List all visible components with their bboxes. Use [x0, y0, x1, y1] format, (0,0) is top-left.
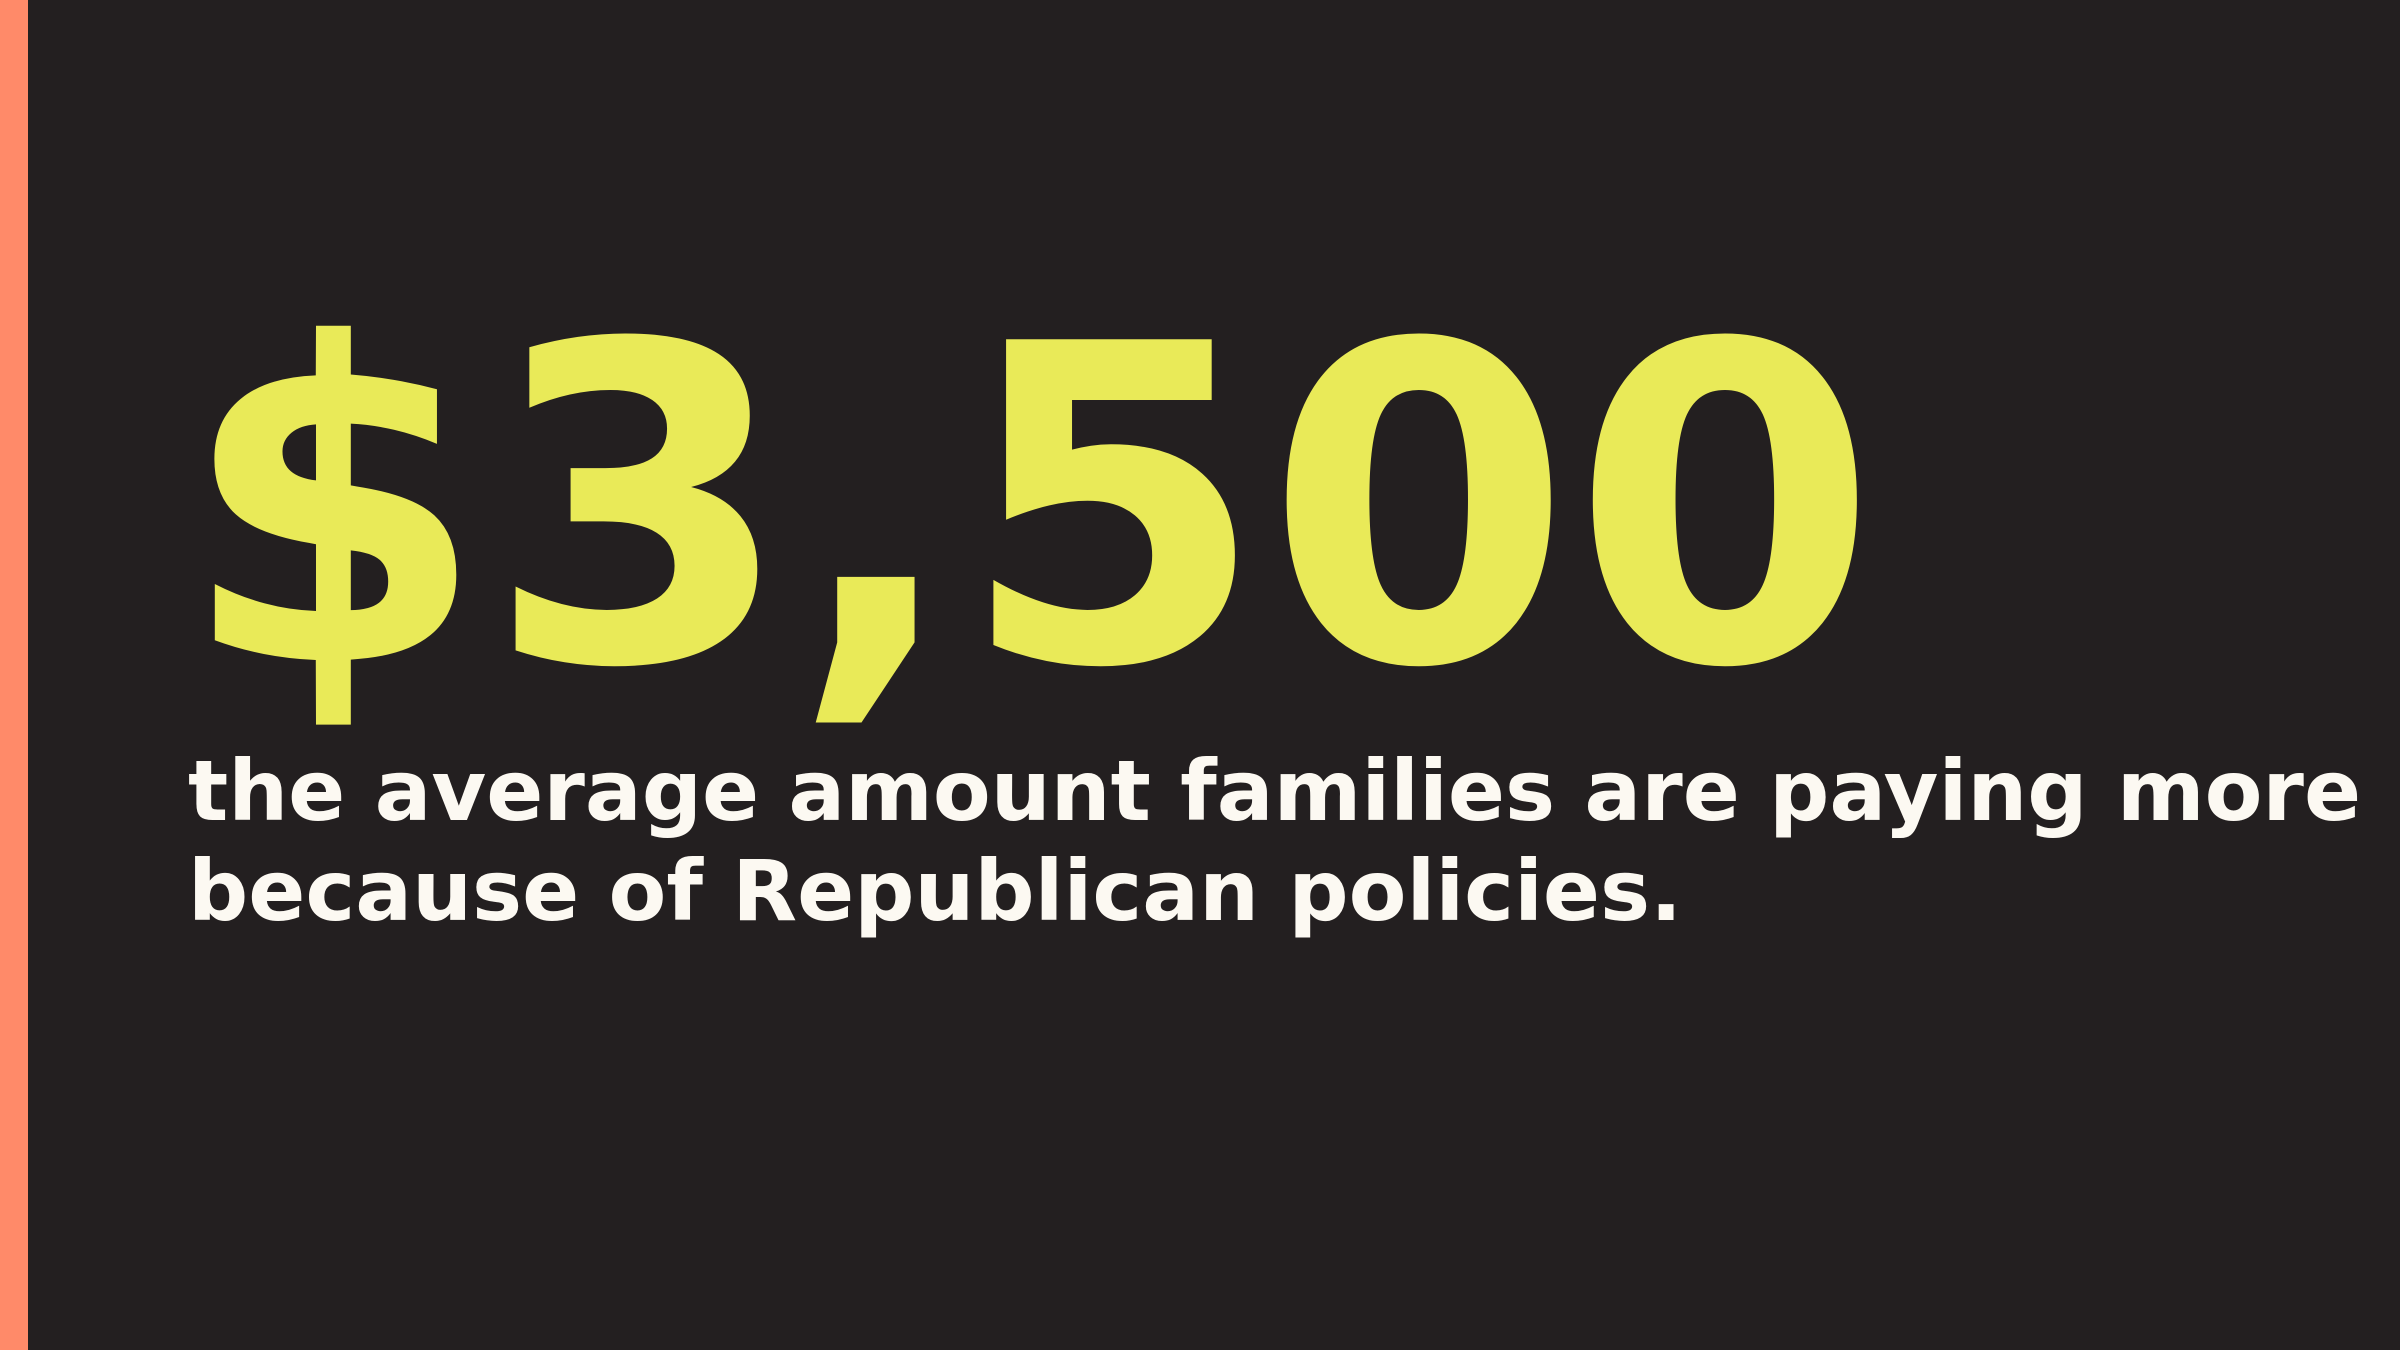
subtitle text: the average amount families are paying more: [188, 742, 2361, 840]
big number: $3,500: [180, 252, 1878, 764]
subtitle text: because of Republican policies.: [188, 842, 1682, 940]
accent bar: [0, 0, 28, 1350]
subtitle text: [188, 742, 2361, 940]
